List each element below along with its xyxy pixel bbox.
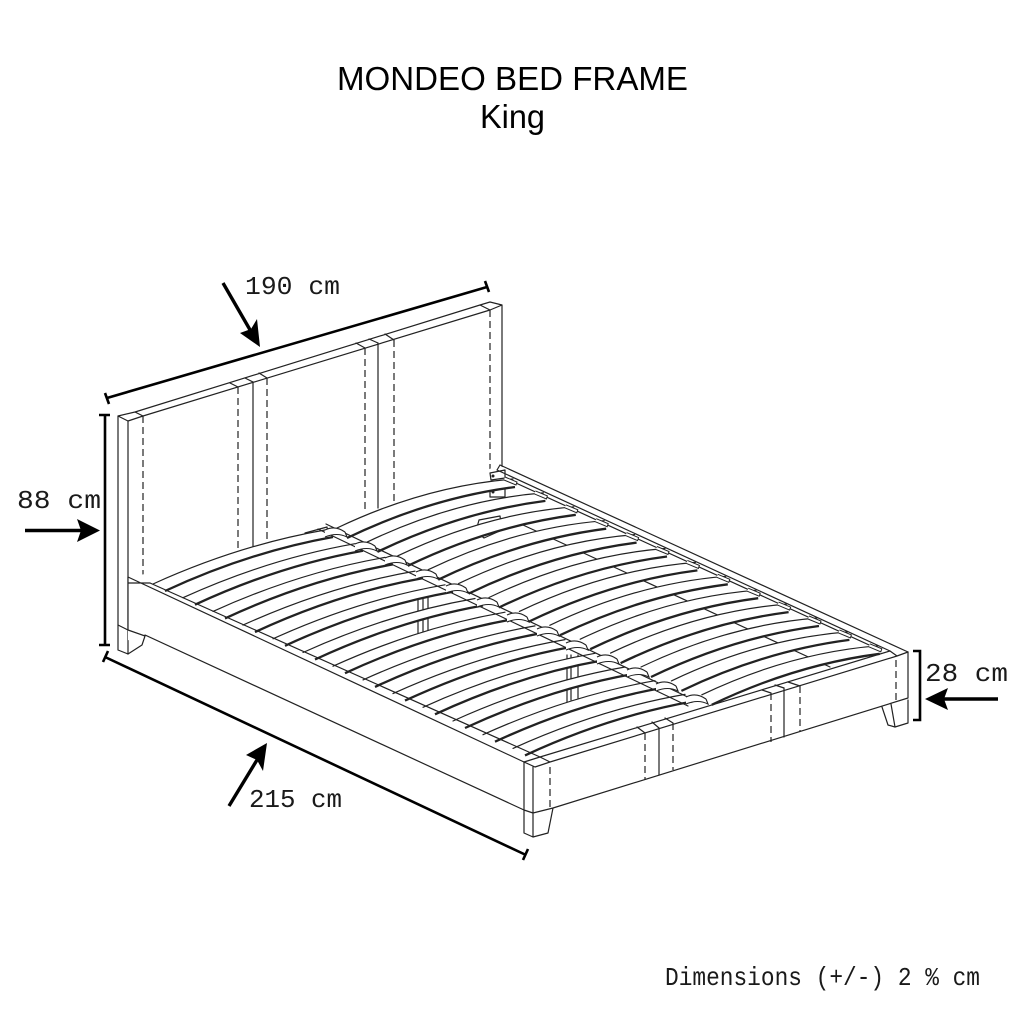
arrow: width xyxy=(223,283,260,347)
dimension: length 215 cm xyxy=(103,651,528,860)
arrow: rail height xyxy=(925,688,998,710)
arrow: height xyxy=(25,519,100,542)
label: 88 cm: 88 cm xyxy=(17,486,101,516)
dimension: rail height 28 cm xyxy=(913,651,1008,720)
dimension: width 190 cm xyxy=(105,272,489,404)
spine pads xyxy=(325,528,708,704)
brackets xyxy=(305,470,505,539)
subtitle: size: King xyxy=(480,98,545,135)
title: MONDEO BED FRAME xyxy=(337,60,688,97)
side rail near xyxy=(118,577,540,813)
label: 28 cm: 28 cm xyxy=(925,659,1008,689)
slats left half xyxy=(153,530,693,755)
dimension: height 88 cm xyxy=(17,415,110,645)
label: 190 cm: 190 cm xyxy=(245,272,340,302)
label: 215 cm: 215 cm xyxy=(249,785,342,815)
arrow: length xyxy=(229,743,267,806)
central spine xyxy=(318,524,696,706)
beam lines under slats xyxy=(418,525,830,702)
slats right half xyxy=(337,477,882,705)
note: dimensions tolerance: Dimensions (+/-) 2 % cm xyxy=(665,963,980,993)
headboard xyxy=(118,302,502,654)
bed frame drawing xyxy=(118,302,908,837)
front rail (foot end) xyxy=(524,651,908,837)
side rail far xyxy=(128,465,908,800)
